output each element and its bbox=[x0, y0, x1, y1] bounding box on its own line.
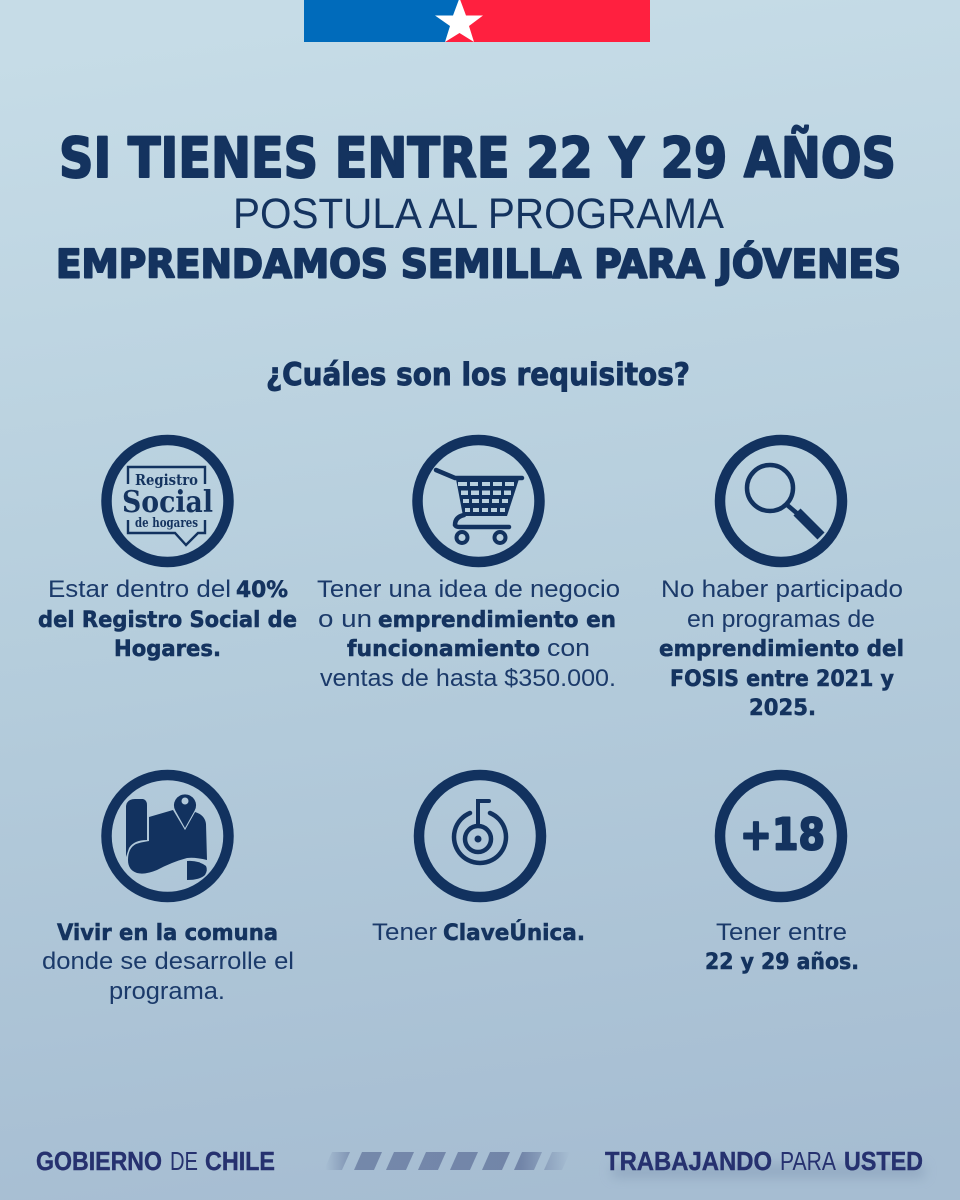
footer: gobierno de chile bbox=[36, 1146, 275, 1176]
text: fosis: en programas de bbox=[687, 606, 875, 633]
text: comuna: Vivir en la comuna bbox=[57, 920, 278, 946]
title: EMPRENDAMOS SEMILLA PARA JÓVENES bbox=[56, 240, 901, 288]
subheading: ¿Cuáles son los requisitos? bbox=[266, 357, 690, 393]
title: POSTULA AL PROGRAMA bbox=[233, 190, 724, 238]
icon: registro social: Social bbox=[122, 485, 213, 520]
text: registro social bbox=[38, 576, 297, 662]
text: fosis: 2025. bbox=[749, 695, 816, 721]
text: registro social: del Registro Social de bbox=[38, 607, 297, 633]
text: comuna: programa. bbox=[109, 978, 225, 1005]
footer: trabajando para usted bbox=[605, 1146, 924, 1177]
text: fosis bbox=[659, 576, 904, 721]
text: comuna: donde se desarrolle el bbox=[42, 948, 294, 975]
icon: shopping cart bbox=[418, 440, 540, 562]
text: edad: Tener entre bbox=[716, 919, 847, 946]
text: idea de negocio: Tener una idea de negocio bbox=[317, 576, 620, 603]
text: clave unica: Tener bbox=[372, 919, 437, 946]
footer: trabajando para usted: USTED bbox=[844, 1146, 923, 1176]
footer: trabajando para usted: TRABAJANDO bbox=[605, 1146, 772, 1176]
footer: stripes bbox=[324, 1152, 570, 1170]
text: edad bbox=[705, 919, 859, 975]
text: idea de negocio: emprendimiento en bbox=[378, 607, 616, 633]
text: idea de negocio: ventas de hasta $350.000. bbox=[320, 665, 616, 692]
text: registro social: Hogares. bbox=[114, 636, 221, 662]
text: idea de negocio: con bbox=[547, 635, 590, 662]
text: fosis: emprendimiento del bbox=[659, 636, 904, 662]
icon: map with pin bbox=[106, 775, 228, 897]
text: comuna bbox=[42, 920, 294, 1005]
text: registro social: 40% bbox=[236, 577, 288, 603]
footer: gobierno de chile: CHILE bbox=[205, 1146, 275, 1176]
text: idea de negocio bbox=[317, 576, 620, 692]
text: edad: 22 y 29 años. bbox=[705, 949, 859, 975]
footer: gobierno de chile: DE bbox=[170, 1146, 198, 1176]
icon: registro social bbox=[106, 440, 228, 562]
text: fosis: FOSIS entre 2021 y bbox=[670, 666, 894, 692]
footer: trabajando para usted: PARA bbox=[780, 1146, 837, 1176]
title bbox=[56, 126, 901, 288]
text: fosis: No haber participado bbox=[661, 576, 903, 603]
flag banner bbox=[304, 0, 650, 42]
icon: plus 18 bbox=[720, 775, 842, 897]
text: clave unica: ClaveÚnica. bbox=[443, 918, 585, 946]
icon: registro social: de hogares bbox=[135, 516, 198, 531]
text: clave unica bbox=[372, 918, 585, 946]
text: registro social: Estar dentro del bbox=[48, 576, 231, 603]
icon: magnifying glass bbox=[720, 440, 842, 562]
text: idea de negocio: o un bbox=[318, 606, 372, 633]
icon: clave unica bbox=[419, 775, 541, 897]
icon: registro social: Registro bbox=[135, 471, 198, 489]
text: idea de negocio: funcionamiento bbox=[347, 636, 540, 662]
footer: gobierno de chile: GOBIERNO bbox=[36, 1146, 162, 1176]
icon: plus 18: +18 bbox=[740, 810, 825, 860]
